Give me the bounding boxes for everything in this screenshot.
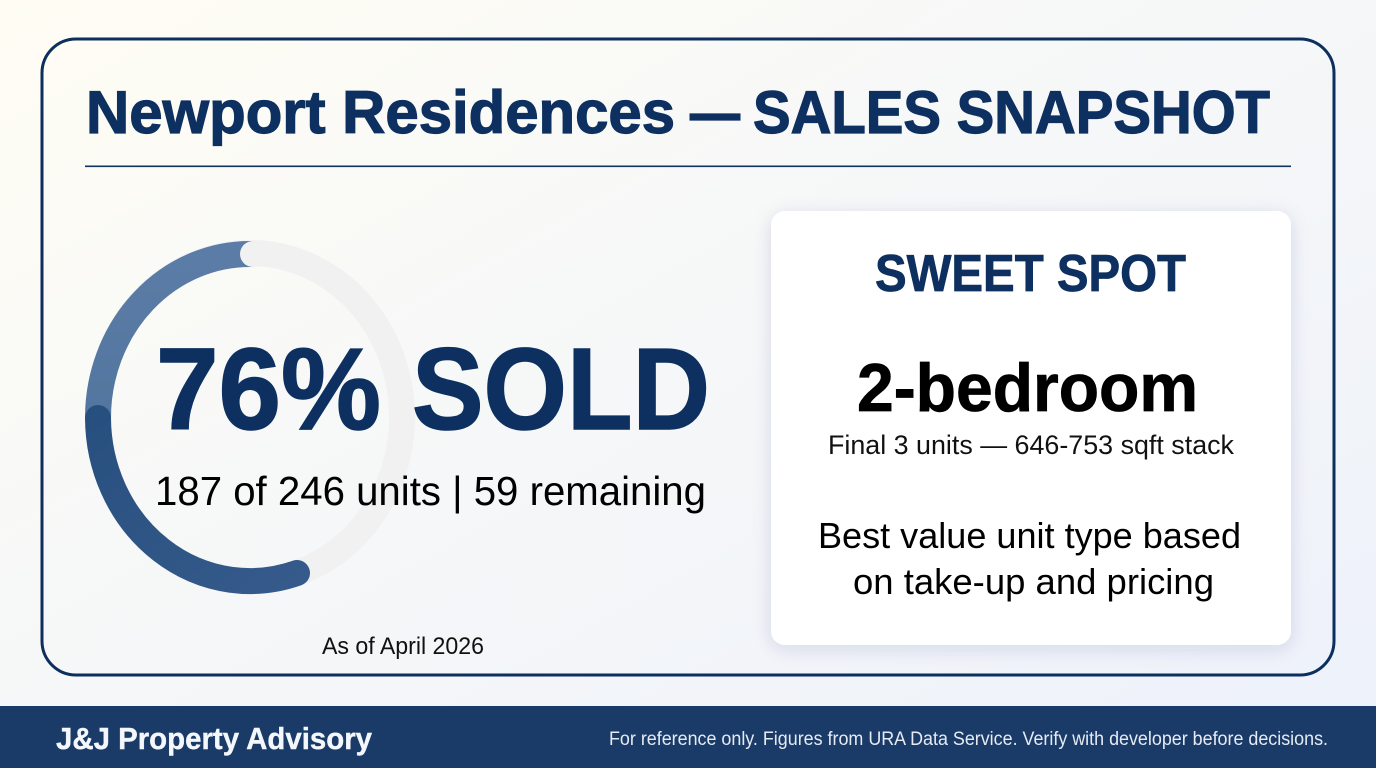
text: final units: Final 3 units — 646-753 sqft stack [828,430,1234,460]
headline: percent sold: 76% [156,324,381,454]
title: Newport Residences [86,79,675,146]
title: — [690,79,740,146]
footer disclaimer: For reference only. Figures from URA Data Service. Verify with developer before decisions. [609,729,1328,750]
text: as-of date: As of April 2026 [322,633,484,660]
text: best value description [818,515,1241,602]
panel: sales progress [98,241,710,660]
text: 2-bedroom: 2-bedroom [857,350,1198,426]
text: best value description: Best value unit type based [818,515,1241,556]
text: unit counts: 187 of 246 units | 59 remaining [155,468,706,514]
panel: sweet spot card [771,211,1291,645]
headline: percent sold: SOLD [412,324,710,454]
headline: percent sold [156,324,710,454]
title [86,79,1270,146]
panel: main frame [42,39,1334,675]
title: SALES SNAPSHOT [753,79,1270,146]
text: best value description: on take-up and pricing [853,561,1214,602]
footer bar [0,706,1376,768]
heading: sweet spot: SWEET SPOT [875,245,1186,303]
footer brand: J&J Property Advisory [56,721,373,756]
chart: progress ring [98,241,402,581]
